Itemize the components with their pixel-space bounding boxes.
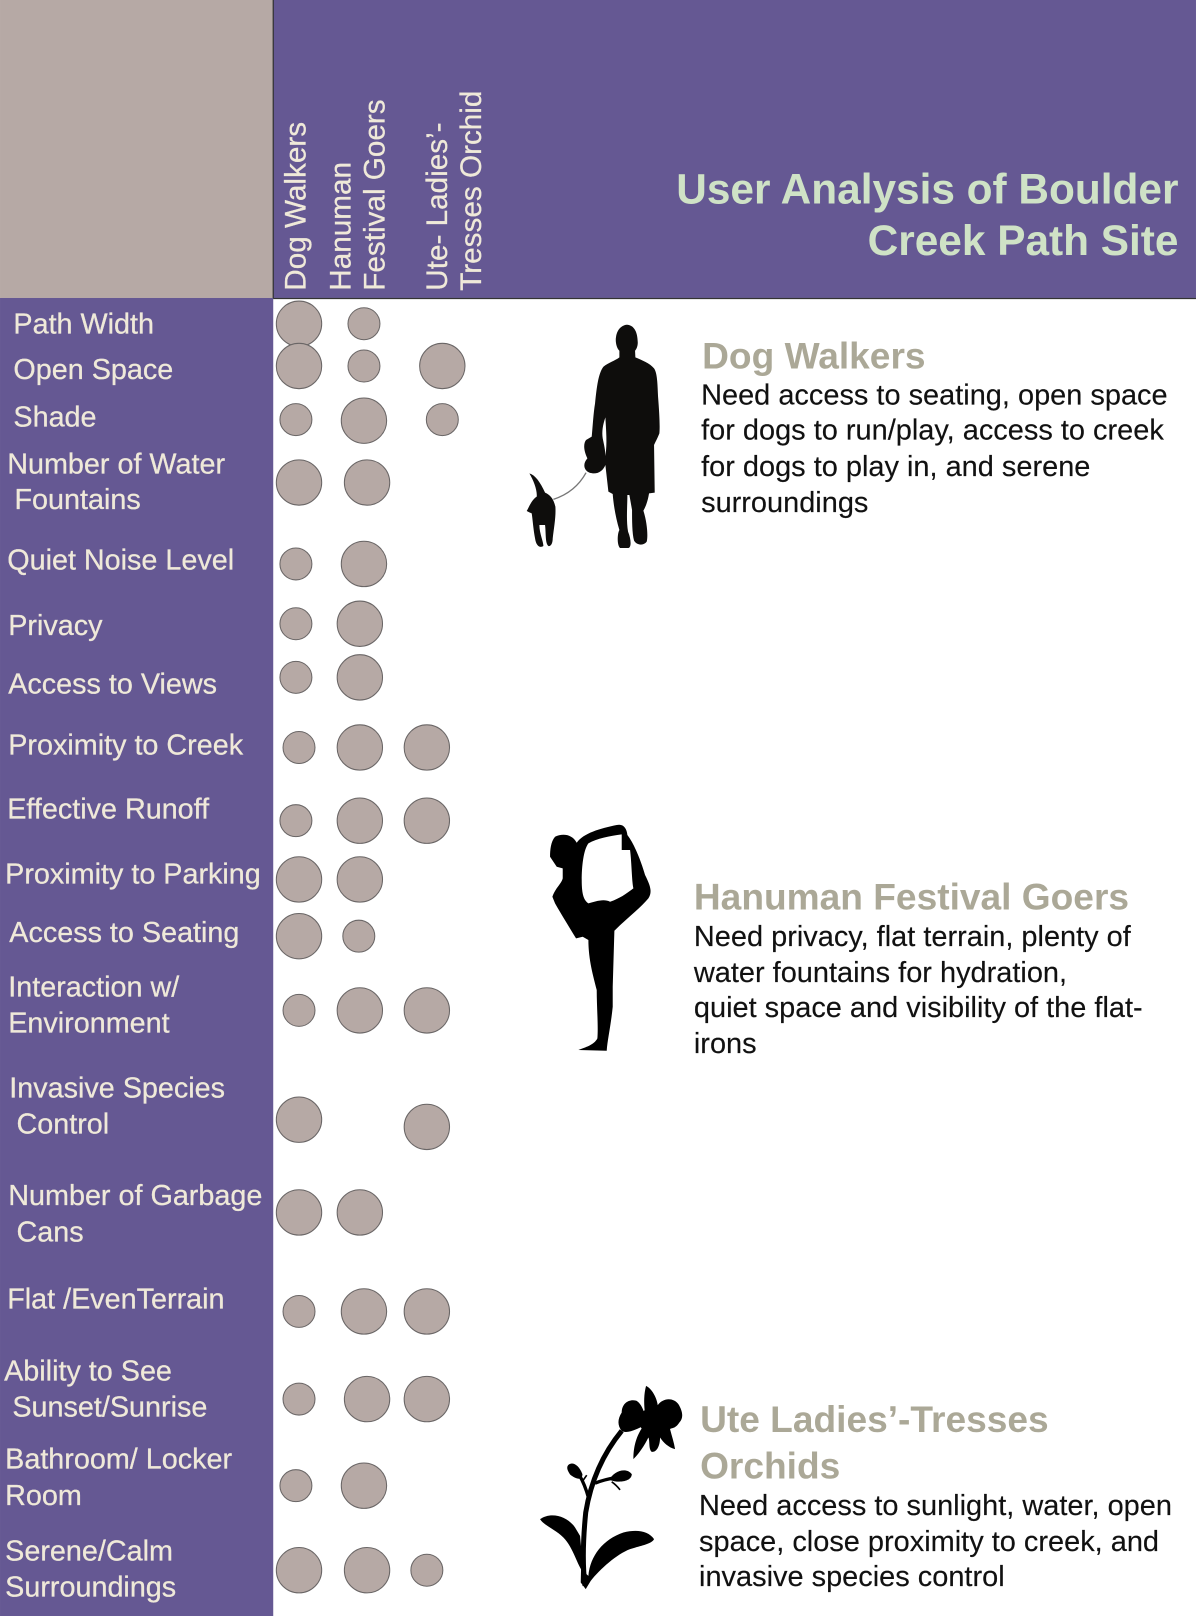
label: serene calm surroundings: Surroundings — [5, 1572, 176, 1604]
label: bathroom locker room: Room — [5, 1480, 82, 1512]
heading and text: dog walkers — [701, 335, 1168, 519]
label: access to views: Access to Views — [8, 668, 217, 700]
label: open space: Open Space — [13, 354, 173, 386]
label: invasive species control: Invasive Species — [9, 1073, 225, 1105]
panel: purple header — [273, 0, 1196, 298]
heading and text: ute ladies'-tresses orchids: Need access to sunlight, water, open — [699, 1490, 1172, 1522]
label: serene calm surroundings — [5, 1535, 176, 1604]
label: bathroom locker room: Bathroom/ Locker — [5, 1444, 233, 1476]
heading and text: dog walkers: Dog Walkers — [702, 335, 926, 377]
heading and text: ute ladies'-tresses orchids — [699, 1398, 1172, 1593]
label: path width: Path Width — [13, 309, 154, 341]
column heading: hanuman festival goers: Hanuman — [325, 162, 358, 291]
label: number of garbage cans: Cans — [17, 1216, 84, 1248]
column heading: hanuman festival goers: Festival Goers — [359, 99, 392, 291]
icon: orchid silhouette — [540, 1386, 682, 1589]
label: effective runoff: Effective Runoff — [7, 794, 210, 826]
label: privacy: Privacy — [8, 610, 103, 642]
heading and text: hanuman festival goers: Hanuman Festival Goers — [694, 875, 1129, 917]
heading and text: dog walkers: surroundings — [701, 487, 868, 519]
heading and text: hanuman festival goers — [693, 875, 1143, 1060]
label: serene calm surroundings: Serene/Calm — [5, 1535, 173, 1567]
label: proximity to parking: Proximity to Parking — [5, 859, 261, 891]
heading and text: ute ladies'-tresses orchids: Orchids — [700, 1444, 840, 1486]
heading and text: dog walkers: for dogs to play in, and serene — [701, 451, 1090, 483]
label: ability to see sunset sunrise: Ability to See — [4, 1356, 172, 1388]
heading and text: hanuman festival goers: Need privacy, flat terrain, plenty of — [694, 921, 1132, 953]
label: invasive species control: Control — [17, 1109, 109, 1141]
heading and text: hanuman festival goers: irons — [694, 1028, 757, 1060]
label: invasive species control — [9, 1073, 225, 1141]
criteria labels — [4, 309, 262, 1604]
heading and text: dog walkers: for dogs to run/play, access to creek — [701, 415, 1164, 447]
column heading: ute ladies'-tresses orchid — [421, 91, 488, 291]
column heading: dog walkers: Dog Walkers — [280, 122, 313, 291]
column heading: hanuman festival goers — [325, 99, 392, 291]
column heading: ute ladies'-tresses orchid: Ute- Ladies’- — [421, 122, 454, 291]
label: ability to see sunset sunrise: Sunset/Sunrise — [12, 1392, 207, 1424]
title — [676, 166, 1178, 264]
heading and text: ute ladies'-tresses orchids: invasive species control — [699, 1561, 1005, 1593]
label: proximity to creek: Proximity to Creek — [8, 730, 244, 762]
bubble matrix — [276, 301, 465, 1593]
label: number of water fountains: Fountains — [14, 484, 141, 516]
label: bathroom locker room — [5, 1444, 233, 1512]
panel: tan corner block — [0, 0, 273, 298]
label: access to seating: Access to Seating — [9, 917, 239, 949]
heading and text: ute ladies'-tresses orchids: Ute Ladies’-Tresses — [700, 1398, 1049, 1440]
column heading: ute ladies'-tresses orchid: Tresses Orchid — [455, 91, 488, 291]
heading and text: ute ladies'-tresses orchids: space, close proximity to creek, and — [699, 1526, 1159, 1558]
panel: purple criteria column — [0, 298, 273, 1616]
icon: yoga pose silhouette — [550, 825, 651, 1051]
label: number of water fountains: Number of Water — [7, 449, 225, 481]
title: User Analysis of Boulder — [676, 166, 1178, 213]
label: shade: Shade — [13, 401, 97, 433]
title: Creek Path Site — [868, 217, 1178, 264]
heading and text: dog walkers: Need access to seating, open space — [701, 380, 1168, 412]
label: interaction with environment — [8, 971, 179, 1040]
heading and text: hanuman festival goers: quiet space and visibility of the flat- — [694, 992, 1143, 1024]
label: interaction with environment: Environment — [8, 1008, 170, 1040]
label: number of garbage cans — [8, 1180, 262, 1248]
user column headings — [280, 91, 488, 291]
icon: dog walker silhouette — [527, 325, 660, 548]
label: number of garbage cans: Number of Garbage — [8, 1180, 262, 1212]
label: interaction with environment: Interaction w/ — [8, 971, 179, 1003]
label: quiet noise level: Quiet Noise Level — [7, 545, 234, 577]
heading and text: hanuman festival goers: water fountains for hydration, — [693, 957, 1067, 989]
label: ability to see sunset sunrise — [4, 1356, 207, 1424]
label: flat even terrain: Flat /EvenTerrain — [7, 1283, 225, 1315]
label: number of water fountains — [7, 449, 225, 516]
